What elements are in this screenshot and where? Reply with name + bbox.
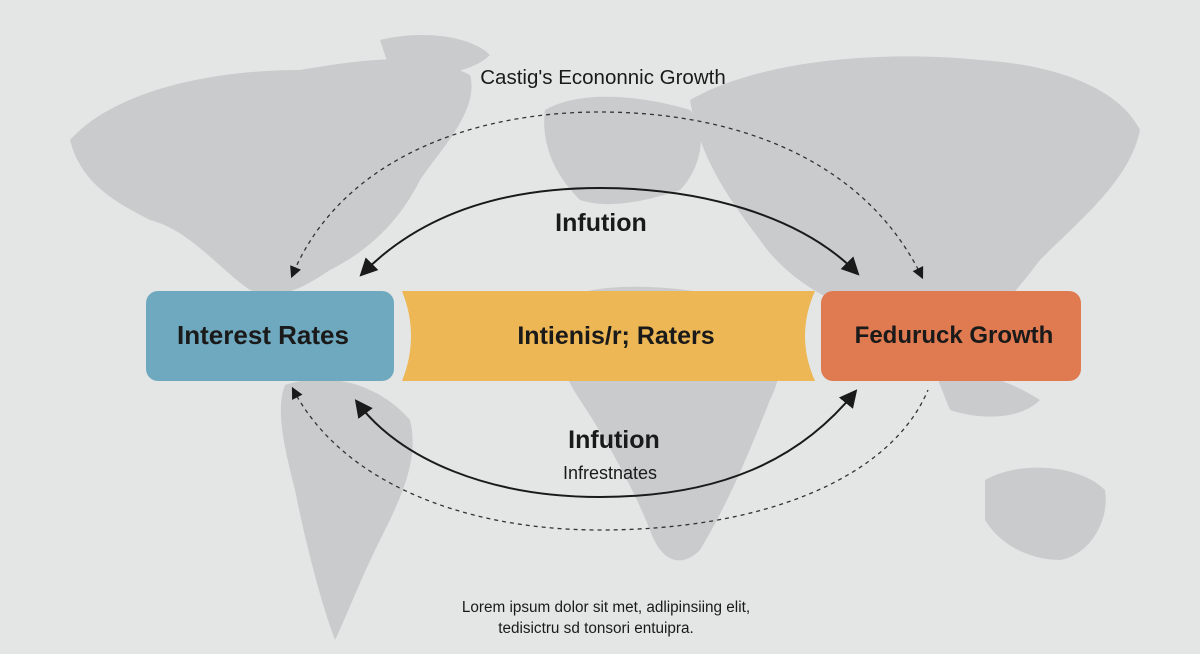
box: Interest Rates — [146, 291, 394, 381]
outer dashed arc bottom — [293, 389, 928, 530]
bottom label: Infution: Infution — [568, 426, 660, 454]
box: Interest Rates: Interest Rates — [177, 320, 349, 350]
footer text: tedisictru sd tonsori entuipra. — [498, 620, 694, 637]
top label: Infution: Infution — [555, 209, 647, 237]
box: middle banner: Intienis/r; Raters — [517, 322, 715, 350]
outer dashed arc top — [292, 112, 922, 277]
inner solid arc bottom — [357, 392, 855, 497]
bottom sublabel: Infrestnates — [563, 463, 657, 483]
inner solid arc top — [362, 188, 857, 274]
title: Castig's Econonnic Growth — [480, 66, 726, 89]
box: Feduruck Growth — [821, 291, 1081, 381]
box: Feduruck Growth: Feduruck Growth — [855, 322, 1053, 349]
footer text — [462, 599, 750, 637]
footer text: Lorem ipsum dolor sit met, adlipinsiing elit, — [462, 599, 750, 616]
box: middle banner — [402, 291, 815, 381]
